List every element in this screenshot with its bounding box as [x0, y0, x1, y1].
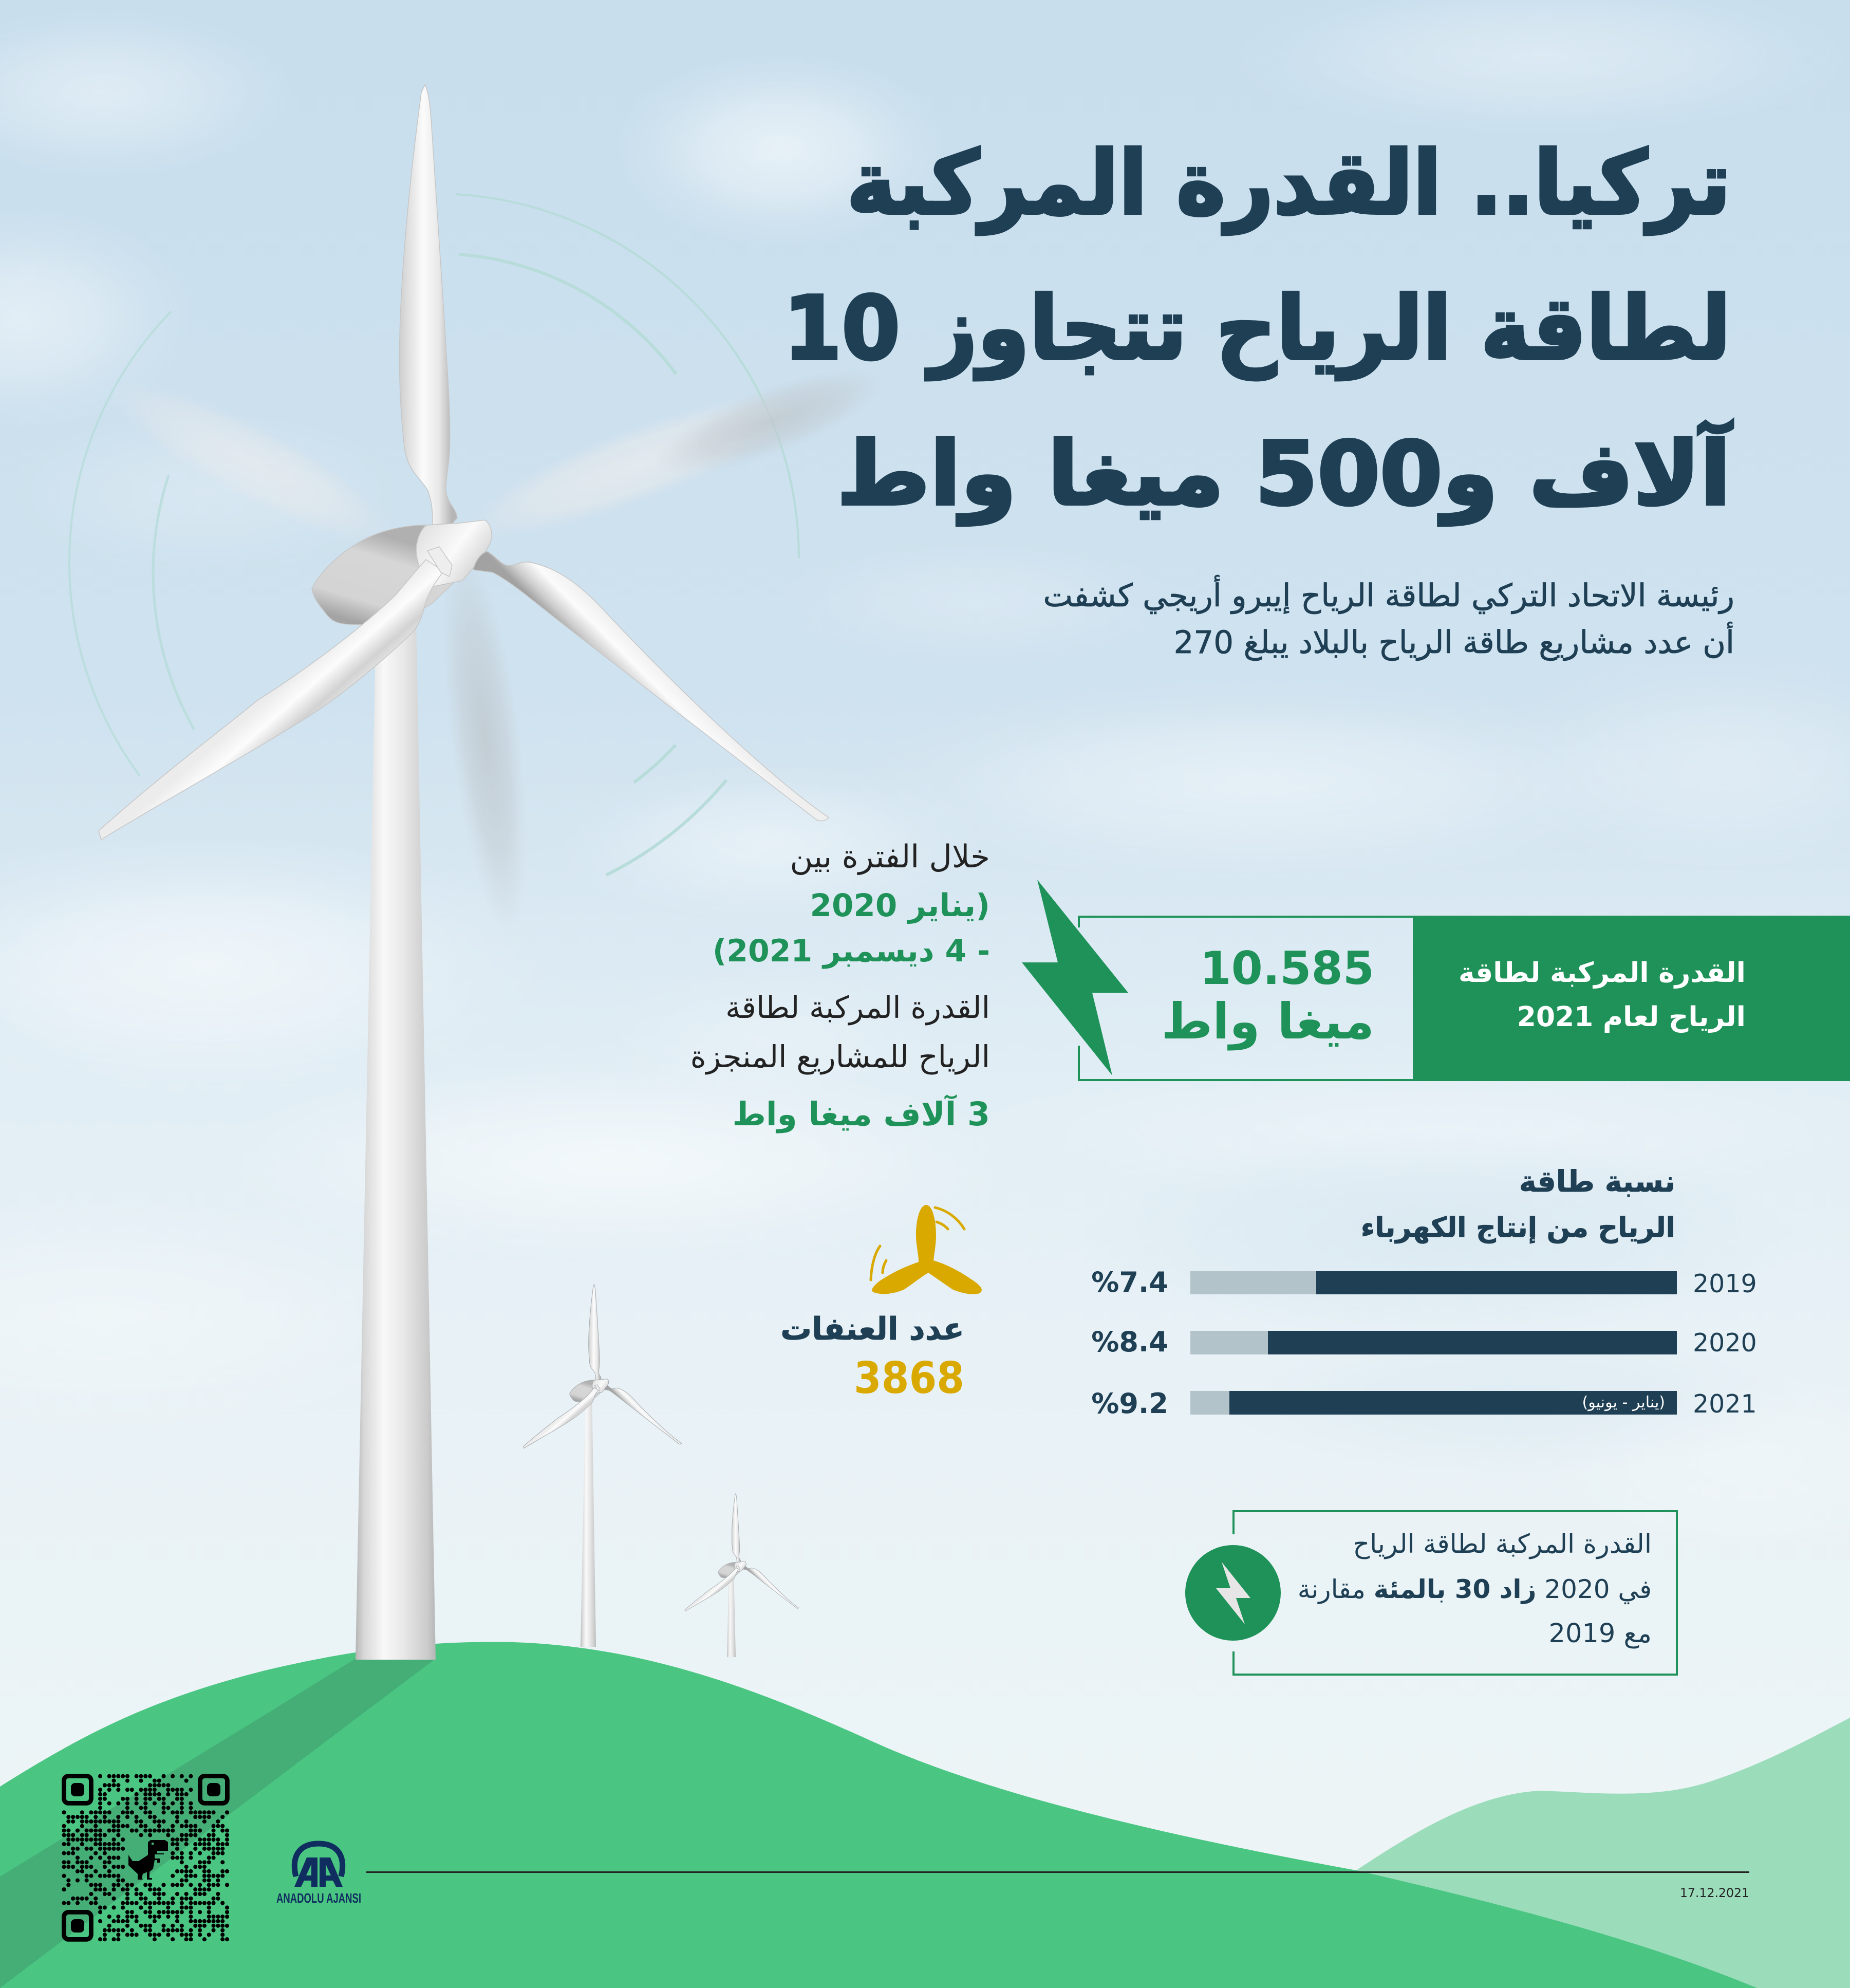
bar chart: wind share of electricity: %7.4: [1091, 1266, 1168, 1298]
motion blur of rotating blades: [94, 346, 898, 938]
panel: installed capacity 2021: الرياح لعام 2021: [1517, 1000, 1746, 1033]
footer rule: [366, 1871, 1749, 1873]
chart heading: نسبة طاقة: [1519, 1165, 1675, 1199]
turbine count: [780, 1311, 964, 1404]
bar chart: wind share of electricity: %8.4: [1091, 1326, 1168, 1358]
icon: dinosaur: [128, 1840, 168, 1880]
chart heading: الرياح من إنتاج الكهرباء: [1361, 1211, 1675, 1243]
bar chart: wind share of electricity: 2021: [1693, 1389, 1757, 1419]
period text block: - 4 ديسمبر 2021): [713, 933, 990, 969]
period text block: [690, 839, 990, 1134]
title: [783, 133, 1733, 526]
main turbine rotor and nacelle: [99, 85, 829, 840]
date: 17.12.2021: [1680, 1886, 1749, 1900]
rotation arcs: [69, 194, 799, 875]
panel: installed capacity 2021: ميغا واط: [1161, 993, 1374, 1051]
title: آلاف و500 ميغا واط: [837, 420, 1733, 526]
logo: Anadolu Ajansi: ANADOLU AJANSI: [276, 1890, 361, 1906]
title: لطاقة الرياح تتجاوز 10: [783, 278, 1731, 380]
panel: installed capacity 2021: 10.585: [1200, 942, 1374, 995]
period text block: 3 آلاف ميغا واط: [733, 1094, 990, 1134]
bar chart: wind share of electricity: %9.2: [1091, 1387, 1168, 1420]
icon: bolt in circle: [1185, 1545, 1281, 1641]
main turbine tower: [356, 622, 436, 1660]
bar chart: wind share of electricity: 2019: [1693, 1269, 1757, 1298]
bar chart: wind share of electricity: [1091, 1266, 1757, 1420]
bar chart: wind share of electricity: (يناير - يونيو): [1582, 1394, 1665, 1411]
subtitle: أن عدد مشاريع طاقة الرياح بالبلاد يبلغ 270: [1174, 622, 1734, 661]
period text block: الرياح للمشاريع المنجزة: [690, 1039, 990, 1075]
QR code: [64, 1776, 227, 1939]
bar chart: wind share of electricity: 2020: [1693, 1328, 1757, 1358]
title: تركيا.. القدرة المركبة: [847, 133, 1731, 235]
period text block: القدرة المركبة لطاقة: [725, 990, 990, 1026]
icon: lightning bolt: [1022, 880, 1128, 1075]
subtitle: رئيسة الاتحاد التركي لطاقة الرياح إيبرو أريجي كشفت: [1043, 575, 1734, 615]
green hill: [0, 1642, 1757, 1988]
logo: Anadolu Ajansi: [276, 1844, 361, 1906]
small turbine 3: [685, 1494, 799, 1657]
callout: 2020 capacity growth: القدرة المركبة لطاقة الرياح: [1353, 1529, 1652, 1559]
turbine count: 3868: [854, 1353, 964, 1404]
subtitle: [1043, 575, 1734, 661]
chart heading: [1361, 1165, 1675, 1243]
callout: 2020 capacity growth: مع 2019: [1549, 1619, 1652, 1649]
panel: installed capacity 2021: [1022, 880, 1850, 1081]
period text block: (يناير 2020: [810, 887, 990, 924]
panel: installed capacity 2021: القدرة المركبة لطاقة: [1459, 956, 1746, 989]
period text block: خلال الفترة بين: [790, 839, 990, 875]
callout: 2020 capacity growth: [1185, 1511, 1677, 1675]
small turbine 2: [524, 1285, 682, 1647]
callout: 2020 capacity growth: في 2020 زاد 30 بالمئة مقارنة: [1298, 1574, 1652, 1604]
tower shadow on hill: [0, 1659, 436, 1988]
icon: turbine propeller: [871, 1205, 982, 1294]
light green back hill: [1356, 1718, 1850, 1988]
turbine count: عدد العنفات: [780, 1311, 964, 1347]
